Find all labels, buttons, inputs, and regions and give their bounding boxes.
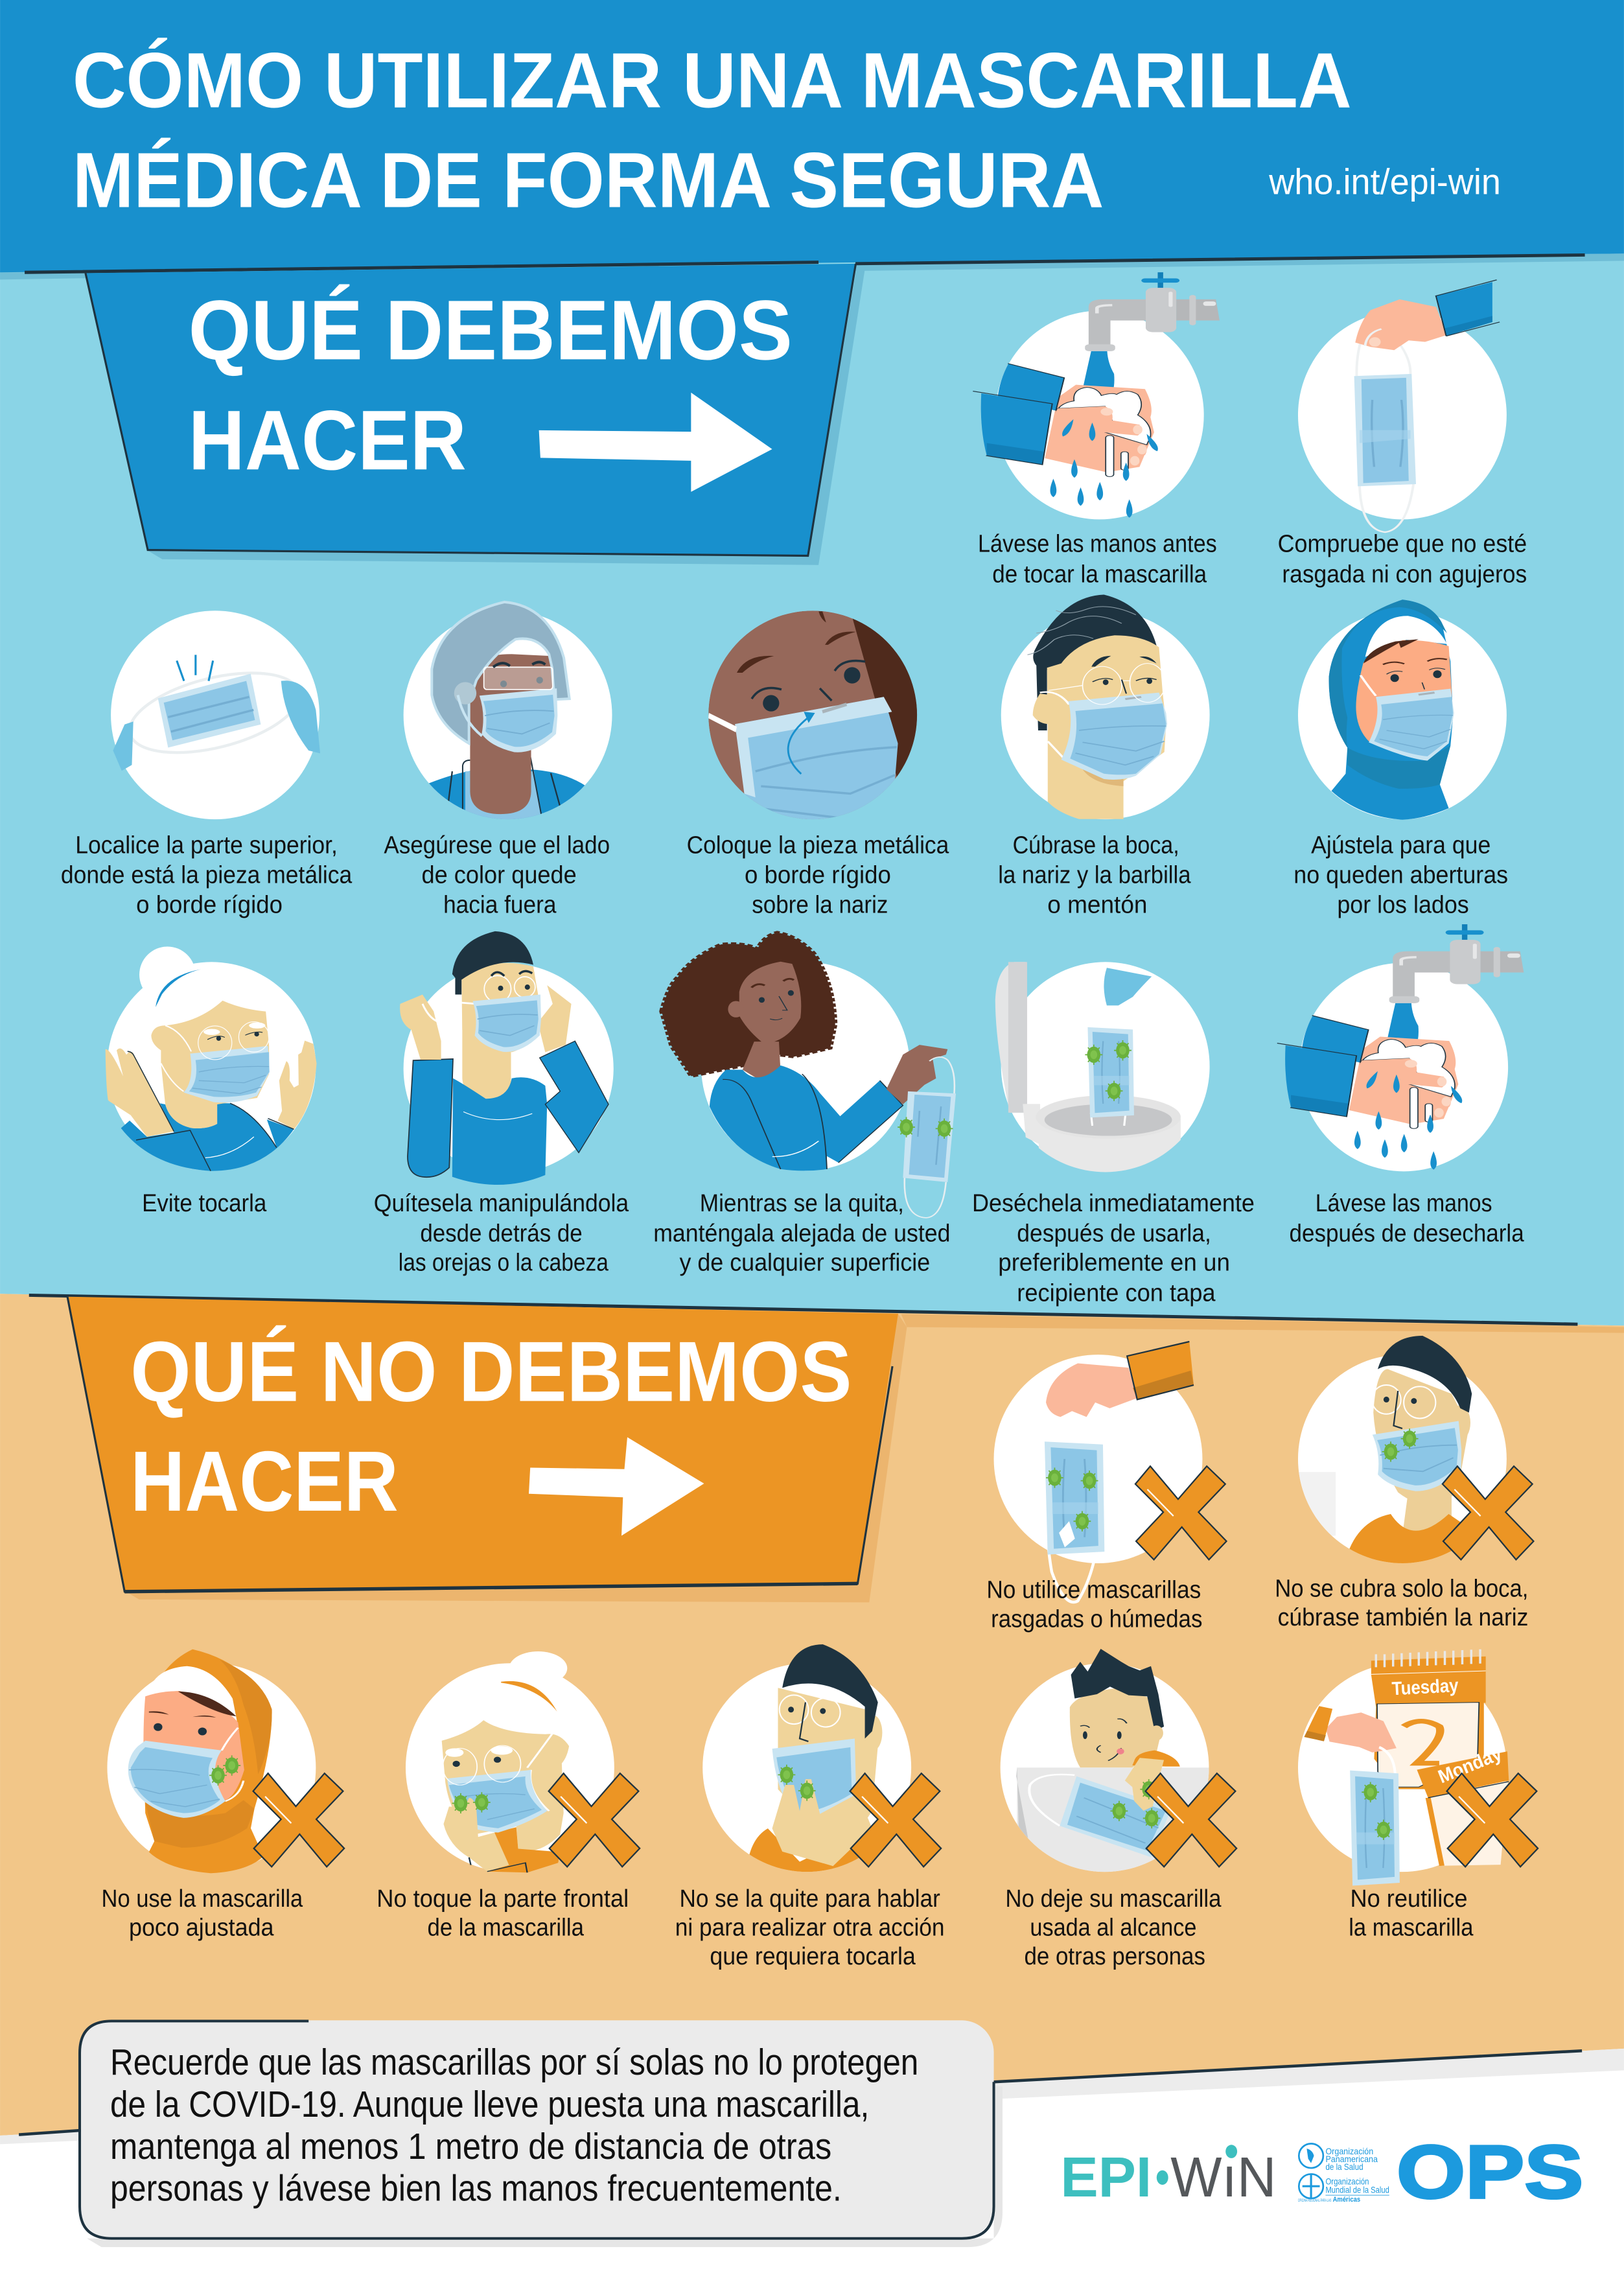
panel: reminder note: mantenga al menos 1 metro de distancia de otras (110, 2126, 831, 2167)
icon: calendar and reused mask: Tuesday (1391, 1675, 1459, 1699)
icon: locate top of mask (111, 611, 320, 819)
icon: woman holding mask away (662, 933, 956, 1218)
caption: do not remove to talk: No se la quite para hablar (679, 1885, 940, 1913)
logo: EPI-WIN: EPI (1060, 2146, 1152, 2209)
caption: locate top: o borde rígido (136, 891, 283, 918)
caption: wash hands before: de tocar la mascarilla (992, 561, 1207, 588)
main title (73, 36, 1352, 224)
icon: woman in blue headscarf adjusting the fit (1298, 600, 1507, 820)
caption: do not remove to talk (675, 1885, 945, 1970)
caption: locate top (61, 832, 353, 918)
caption: remove from behind: Quítesela manipulándola (374, 1190, 629, 1217)
logo: EPI-WIN (1060, 2145, 1276, 2209)
caption: wash hands after (1290, 1190, 1524, 1248)
logo: PAHO WHO emblems: Organización (1325, 2177, 1369, 2187)
caption: loose mask: No use la mascarilla (102, 1885, 303, 1913)
logo: EPI-WIN: WıN (1170, 2146, 1276, 2209)
icon: man pulling mask to talk (702, 1644, 911, 1878)
panel: qué no debemos hacer banner: QUÉ NO DEBEMOS (130, 1324, 852, 1419)
background: orange section (0, 1294, 1624, 2136)
panel: reminder note: de la COVID-19. Aunque lleve puesta una mascarilla, (110, 2084, 869, 2125)
icon: calendar and reused mask (1298, 1649, 1509, 1886)
panel: qué no debemos hacer banner (67, 1297, 907, 1602)
caption: loose mask: poco ajustada (129, 1915, 274, 1942)
header band (0, 0, 1624, 272)
icon: woman with loose mask (107, 1649, 316, 1873)
icon: discard mask in lidded bin (995, 962, 1210, 1174)
caption: keep away: manténgala alejada de usted (653, 1220, 950, 1248)
caption: remove from behind: las orejas o la cabeza (399, 1249, 609, 1276)
caption: cover nose too: cúbrase también la nariz (1278, 1604, 1528, 1631)
caption: wash hands before: Lávese las manos antes (978, 531, 1217, 558)
caption: do not leave within reach: de otras personas (1024, 1943, 1205, 1970)
background: light blue section (0, 253, 1624, 1325)
caption: avoid touching: Evite tocarla (142, 1190, 267, 1217)
icon: torn wet mask (994, 1342, 1202, 1602)
footer divider lines (19, 2051, 1582, 2135)
icon: cross (1447, 1773, 1538, 1867)
website link: who.int/epi-win (1268, 161, 1501, 202)
caption: place over nose (687, 832, 949, 918)
caption: keep away: y de cualquier superficie (679, 1249, 930, 1276)
caption: keep away (653, 1190, 950, 1276)
icon: nurse with face shield (404, 602, 612, 822)
logo: PAHO WHO emblems: Panamericana (1325, 2154, 1378, 2164)
icon: cross (1146, 1773, 1236, 1867)
caption: check mask: Compruebe que no esté (1278, 531, 1527, 558)
icon: older woman touching front of mask (406, 1651, 614, 1872)
panel: qué no debemos hacer banner: HACER (130, 1434, 399, 1529)
caption: discard: preferiblemente en un (998, 1249, 1230, 1276)
caption: do not reuse: No reutilice (1350, 1885, 1468, 1913)
caption: discard: recipiente con tapa (1017, 1279, 1216, 1307)
logo: PAHO WHO emblems: Organización (1325, 2147, 1373, 2156)
panel: reminder note (80, 2020, 1003, 2247)
icon: cross (1443, 1466, 1533, 1559)
logo: PAHO WHO emblems (1298, 2144, 1389, 2204)
caption: do not remove to talk: que requiera tocarla (710, 1943, 916, 1970)
caption: do not remove to talk: ni para realizar otra acción (675, 1915, 945, 1942)
caption: coloured side out: Asegúrese que el lado (384, 832, 610, 859)
caption: cover mouth (998, 832, 1191, 918)
panel: reminder note: Recuerde que las mascarillas por sí solas no lo protegen (110, 2042, 918, 2083)
icon: man covering mouth, nose and chin (1001, 595, 1210, 819)
caption: do not touch (377, 1885, 629, 1942)
caption: keep away: Mientras se la quita, (700, 1190, 904, 1217)
icon: cross (549, 1773, 640, 1867)
caption: cover mouth: o mentón (1047, 891, 1147, 918)
caption: do not leave within reach (1005, 1885, 1222, 1970)
main title: MÉDICA DE FORMA SEGURA (73, 137, 1104, 224)
logo: PAHO WHO emblems: Américas (1333, 2196, 1360, 2204)
caption: coloured side out: hacia fuera (443, 891, 557, 918)
caption: do not leave within reach: No deje su mascarilla (1005, 1885, 1222, 1913)
caption: torn mask (986, 1577, 1202, 1633)
section divider line (29, 1295, 1577, 1324)
caption: do not touch: No toque la parte frontal (377, 1885, 629, 1913)
caption: cover mouth: Cúbrase la boca, (1013, 832, 1179, 859)
panel: qué debemos hacer banner (86, 264, 865, 565)
icon: cross (253, 1773, 344, 1867)
caption: locate top: donde está la pieza metálica (61, 861, 353, 889)
icon: man with mask below nose (1298, 1336, 1507, 1574)
logo: PAHO WHO emblems: Mundial de la Salud (1325, 2185, 1389, 2195)
caption: adjust: por los lados (1337, 891, 1469, 918)
caption: torn mask: No utilice mascarillas (986, 1577, 1201, 1604)
caption: torn mask: rasgadas o húmedas (991, 1605, 1202, 1633)
caption: loose mask (102, 1885, 303, 1942)
panel: qué debemos hacer banner: QUÉ DEBEMOS (189, 283, 793, 377)
caption: coloured side out: de color quede (422, 861, 577, 889)
caption: wash hands after: después de desecharla (1290, 1220, 1524, 1248)
caption: discard (972, 1190, 1255, 1307)
icon: man removing mask from behind the ears (400, 931, 614, 1185)
caption: remove from behind: desde detrás de (420, 1220, 583, 1248)
icon: wash hands before (973, 272, 1220, 519)
caption: do not leave within reach: usada al alcance (1030, 1915, 1197, 1942)
icon: place metallic strip over the nose (708, 611, 918, 819)
main title: CÓMO UTILIZAR UNA MASCARILLA (73, 36, 1352, 124)
caption: wash hands after: Lávese las manos (1316, 1190, 1492, 1217)
caption: place over nose: sobre la nariz (752, 891, 888, 918)
caption: cover nose too: No se cubra solo la boca, (1275, 1575, 1528, 1602)
logo: PAHO WHO emblems: de la Salud (1325, 2162, 1363, 2172)
caption: check mask (1278, 531, 1527, 588)
caption: wash hands before (978, 531, 1217, 588)
icon: boy near used mask on table (1001, 1649, 1214, 1876)
caption: adjust (1293, 832, 1508, 918)
icon: wash hands after (1277, 924, 1524, 1171)
caption: discard: Deséchela inmediatamente (972, 1190, 1255, 1217)
icon: cross (1135, 1466, 1227, 1559)
logo: PAHO WHO emblems: OFICINA REGIONAL PARA LAS (1298, 2198, 1332, 2203)
logo: OPS: OPS (1397, 2130, 1583, 2214)
caption: check mask: rasgada ni con agujeros (1282, 561, 1527, 588)
caption: place over nose: o borde rígido (745, 861, 891, 889)
caption: coloured side out (384, 832, 610, 918)
caption: do not reuse (1349, 1885, 1474, 1942)
caption: place over nose: Coloque la pieza metálica (687, 832, 949, 859)
icon: check mask (1298, 280, 1507, 532)
caption: cover nose too (1275, 1575, 1528, 1631)
caption: adjust: no queden aberturas (1293, 861, 1508, 889)
background: grey footer band (0, 2049, 1624, 2144)
panel: qué debemos hacer banner: HACER (189, 393, 467, 487)
icon: older woman avoiding touching (106, 947, 317, 1171)
caption: cover mouth: la nariz y la barbilla (998, 861, 1191, 889)
caption: remove from behind (374, 1190, 629, 1276)
caption: adjust: Ajústela para que (1311, 832, 1491, 859)
icon: cross (850, 1773, 941, 1867)
caption: discard: después de usarla, (1017, 1220, 1211, 1248)
caption: do not reuse: la mascarilla (1349, 1915, 1474, 1942)
panel: reminder note: personas y lávese bien las manos frecuentemente. (110, 2168, 842, 2209)
caption: do not touch: de la mascarilla (427, 1915, 585, 1942)
icon: calendar and reused mask: Monday (1435, 1743, 1505, 1788)
caption: locate top: Localice la parte superior, (75, 832, 338, 859)
